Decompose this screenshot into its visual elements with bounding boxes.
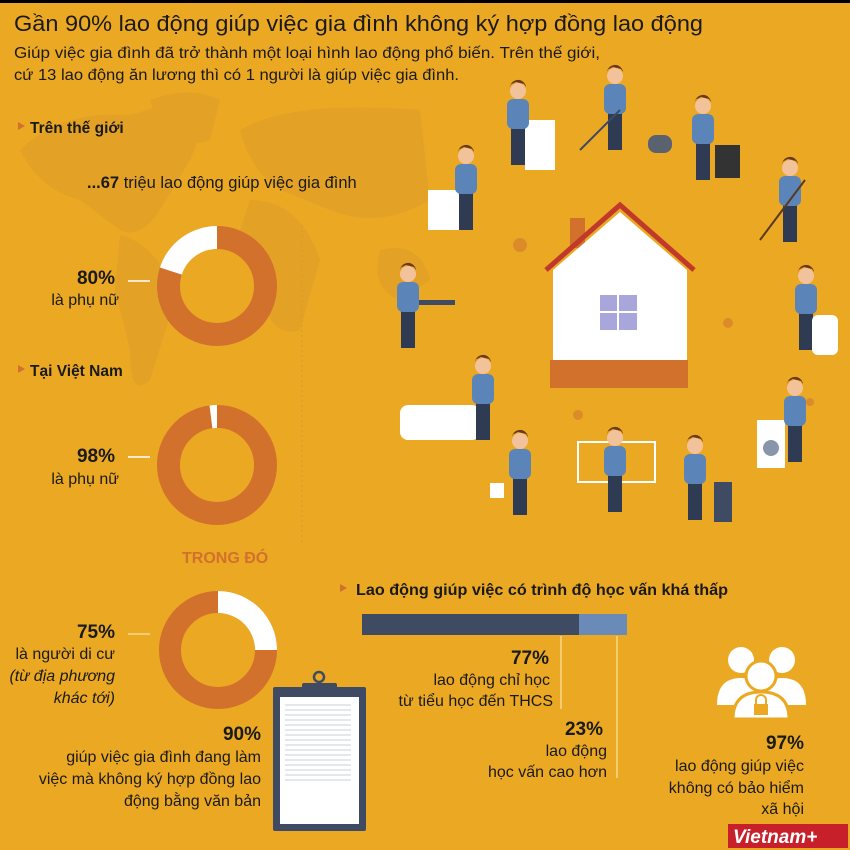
heading: world: Trên thế giới bbox=[30, 120, 124, 137]
stat: 23%: lao động bbox=[546, 743, 607, 760]
stat: 98% women: là phụ nữ bbox=[51, 471, 119, 488]
stat: 23%: 23% bbox=[565, 719, 603, 740]
bar chart: education bbox=[362, 614, 627, 778]
stat: 23%: học vấn cao hơn bbox=[488, 764, 607, 781]
worker: sweep bbox=[760, 157, 805, 242]
text: 67 million: ...67 triệu lao động giúp việc gia đình bbox=[87, 174, 357, 192]
worker: toilet bbox=[795, 265, 838, 355]
stat: 98% women bbox=[51, 446, 150, 488]
stat: 97%: 97% bbox=[766, 733, 804, 754]
worker: sink bbox=[507, 80, 555, 170]
worker: vacuum bbox=[580, 65, 672, 153]
decorative map bbox=[20, 92, 430, 386]
donut: 75% bbox=[170, 591, 277, 698]
illustration: house bbox=[546, 205, 694, 388]
heading: Vietnam: Tại Việt Nam bbox=[30, 363, 123, 380]
icon: people with lock bbox=[717, 647, 806, 719]
stat: 97%: xã hội bbox=[761, 801, 804, 818]
worker: washer bbox=[757, 377, 806, 468]
stat: 75% migrants bbox=[9, 622, 150, 707]
stat: 97%: lao động giúp việc bbox=[675, 758, 804, 775]
stat: 77% bbox=[398, 648, 553, 710]
stat: 80% women bbox=[51, 268, 150, 309]
subtitle: Giúp việc gia đình đã trở thành một loại hình lao động phổ biến. Trên thế giới, bbox=[14, 45, 600, 62]
stat: 75% migrants: 75% bbox=[77, 622, 115, 643]
stat: 23% bbox=[488, 719, 607, 781]
stat: 98% women: 98% bbox=[77, 446, 115, 467]
worker: trash bbox=[692, 95, 740, 180]
worker: bin bbox=[684, 435, 732, 522]
stat: 77%: từ tiểu học đến THCS bbox=[398, 692, 553, 710]
worker: mop bbox=[490, 430, 531, 515]
stat: 90% no contract: việc mà không ký hợp đồng lao bbox=[39, 771, 261, 788]
worker: dishes bbox=[397, 263, 455, 348]
logo bbox=[728, 824, 848, 848]
worker: window bbox=[578, 427, 655, 512]
stat: 75% migrants: là người di cư bbox=[15, 646, 115, 663]
title: Gần 90% lao động giúp việc gia đình không ký hợp đồng lao động bbox=[14, 11, 703, 36]
stat: 90% no contract: 90% bbox=[223, 724, 261, 745]
subtitle bbox=[14, 45, 600, 84]
stat: 97%: không có bảo hiểm bbox=[669, 779, 804, 797]
stat: 80% women: là phụ nữ bbox=[51, 292, 119, 309]
stat: 77%: 77% bbox=[511, 648, 549, 669]
stat: 75% migrants: khác tới) bbox=[54, 690, 115, 707]
donut: 98% bbox=[168, 405, 266, 514]
stat: 90% no contract bbox=[39, 724, 261, 810]
stat: 80% women: 80% bbox=[77, 268, 115, 289]
stat: 90% no contract: giúp việc gia đình đang làm bbox=[66, 749, 261, 766]
label: trong do: TRONG ĐÓ bbox=[182, 548, 268, 567]
stat: 75% migrants: (từ địa phương bbox=[9, 668, 115, 685]
worker: bath bbox=[400, 355, 494, 440]
worker: plant bbox=[428, 145, 477, 230]
icon: clipboard bbox=[273, 672, 366, 831]
illustration: workers bbox=[397, 65, 838, 522]
stat: 77%: lao động chỉ học bbox=[433, 672, 550, 689]
logo: Vietnam+ bbox=[733, 827, 817, 848]
heading: education: Lao động giúp việc có trình độ học vấn khá thấp bbox=[356, 582, 728, 599]
stat: 90% no contract: động bằng văn bản bbox=[124, 791, 261, 810]
subtitle: cứ 13 lao động ăn lương thì có 1 người là giúp việc gia đình. bbox=[14, 67, 459, 84]
stat: 97% bbox=[669, 733, 804, 818]
decorative drops bbox=[513, 238, 814, 420]
donut: 80% bbox=[160, 226, 266, 334]
